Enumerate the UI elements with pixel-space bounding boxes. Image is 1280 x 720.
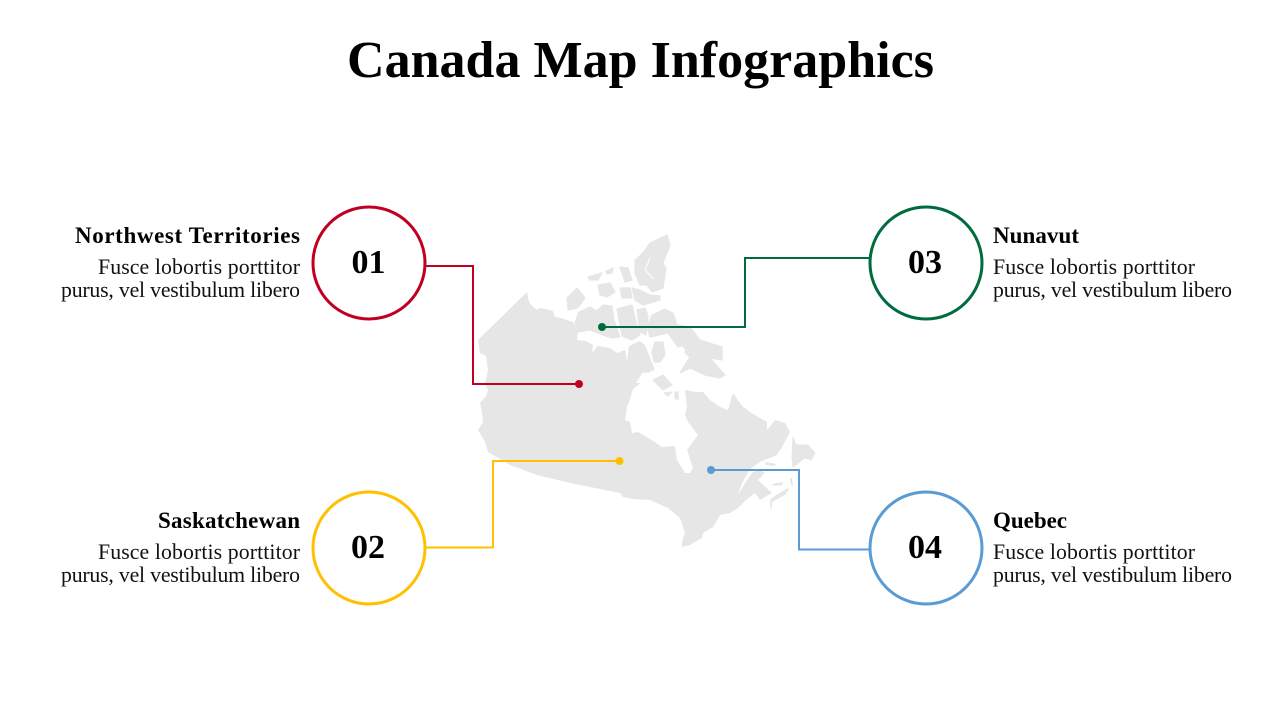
connector: 04 Quebec: [707, 466, 870, 550]
text block: Nunavut: Nunavut: [993, 223, 1079, 248]
text block: Saskatchewan: [61, 508, 301, 587]
badge: 02: [313, 492, 425, 604]
title: Canada Map Infographics: [347, 32, 934, 89]
text block: Nunavut: purus, vel vestibulum libero: [993, 278, 1232, 302]
map: Arctic channels: [645, 258, 654, 279]
map: Canada silhouette: [478, 235, 815, 547]
text block: Northwest Territories: [61, 223, 301, 302]
badge: 02: 02: [351, 529, 385, 566]
badge: 04: [870, 492, 982, 604]
map: Baffin lake: [677, 346, 685, 356]
text block: Quebec: Fusce lobortis porttitor: [993, 540, 1196, 564]
text block: Northwest Territories: purus, vel vestibulum libero: [61, 278, 300, 302]
badge: 03: [870, 207, 982, 319]
map: Nova Scotia: [771, 489, 788, 508]
text block: Quebec: purus, vel vestibulum libero: [993, 563, 1232, 587]
badge: 03: 03: [908, 244, 942, 281]
connector: 03 Nunavut: [598, 258, 870, 331]
badge: 04: 04: [908, 529, 942, 566]
text block: Northwest Territories: Northwest Territories: [75, 223, 300, 248]
text block: Saskatchewan: Fusce lobortis porttitor: [98, 540, 301, 564]
text block: Nunavut: Fusce lobortis porttitor: [993, 255, 1196, 279]
text block: Quebec: [993, 508, 1232, 587]
badge: 01: [313, 207, 425, 319]
text block: Northwest Territories: Fusce lobortis porttitor: [98, 255, 301, 279]
map: Newfoundland: [792, 437, 815, 467]
text block: Saskatchewan: purus, vel vestibulum libero: [61, 563, 300, 587]
text block: Nunavut: [993, 223, 1232, 302]
connector: 01 Northwest Territories: [426, 266, 583, 388]
map: Arctic islands: [567, 235, 725, 400]
text block: Saskatchewan: Saskatchewan: [158, 508, 300, 533]
map: Gulf islands: [765, 462, 793, 486]
text block: Quebec: Quebec: [993, 508, 1067, 533]
badge: 01: 01: [352, 244, 386, 281]
connector: 02 Saskatchewan: [426, 457, 624, 548]
